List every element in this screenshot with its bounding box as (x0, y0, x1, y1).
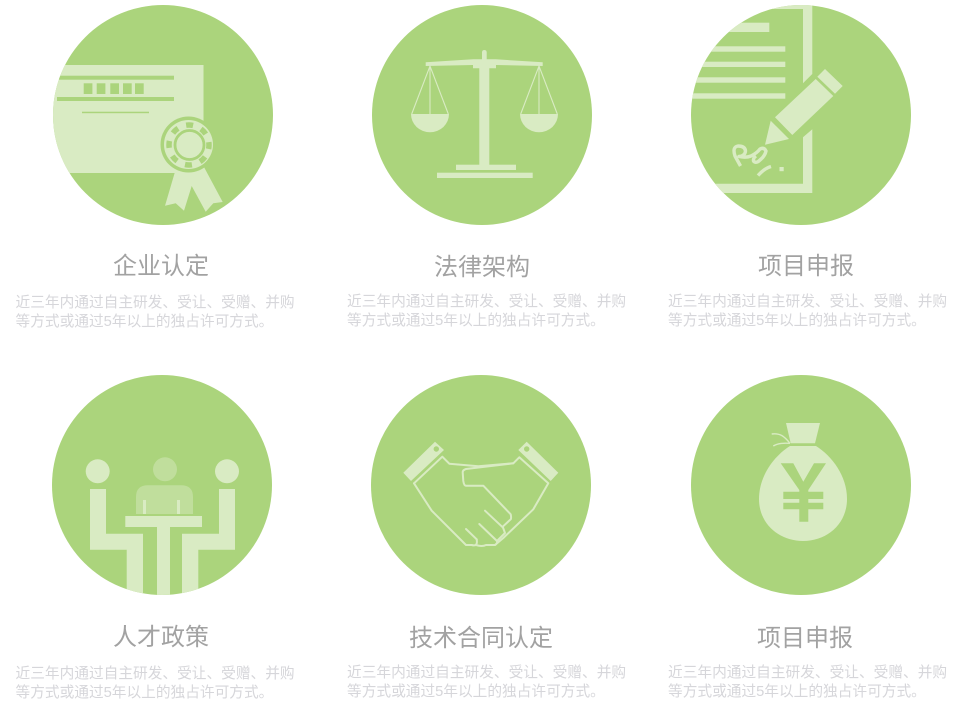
icon: handshake (371, 375, 591, 595)
text: description 1: 等方式或通过5年以上的独占许可方式。 (16, 314, 273, 330)
text: description 2: 近三年内通过自主研发、受让、受赠、并购 (347, 294, 626, 310)
title: 项目申报: 项目申报 (757, 625, 853, 652)
icon: meeting people (52, 375, 272, 597)
text: description 1 (16, 294, 295, 330)
icon: money bag (691, 375, 911, 595)
title: 法律架构: 法律架构 (434, 254, 530, 281)
text: description 3 (668, 293, 947, 328)
icon grid (52, 5, 911, 595)
text: description 6 (668, 664, 947, 700)
text: description 6: 近三年内通过自主研发、受让、受赠、并购 (668, 665, 947, 681)
text: description 1: 近三年内通过自主研发、受让、受赠、并购 (16, 295, 295, 311)
title: 项目申报: 项目申报 (758, 253, 854, 280)
text: description 6: 等方式或通过5年以上的独占许可方式。 (668, 684, 926, 700)
text: description 2 (347, 293, 626, 328)
icon: signing document (680, 0, 911, 225)
text: description 4: 等方式或通过5年以上的独占许可方式。 (16, 684, 273, 700)
text: description 3: 等方式或通过5年以上的独占许可方式。 (668, 312, 926, 328)
text: description 5: 近三年内通过自主研发、受让、受赠、并购 (347, 665, 626, 681)
text: description 4 (16, 665, 295, 700)
text: description 5: 等方式或通过5年以上的独占许可方式。 (347, 684, 605, 700)
title: 技术合同认定: 技术合同认定 (409, 625, 553, 652)
title: 企业认定: 企业认定 (113, 253, 209, 280)
text: description 3: 近三年内通过自主研发、受让、受赠、并购 (668, 294, 947, 310)
text: description 2: 等方式或通过5年以上的独占许可方式。 (347, 312, 605, 328)
text: description 4: 近三年内通过自主研发、受让、受赠、并购 (16, 666, 295, 682)
icon: certificate (40, 5, 273, 225)
icon: balance scale (372, 5, 592, 225)
text: description 5 (347, 664, 626, 700)
title: 人才政策: 人才政策 (113, 624, 209, 651)
